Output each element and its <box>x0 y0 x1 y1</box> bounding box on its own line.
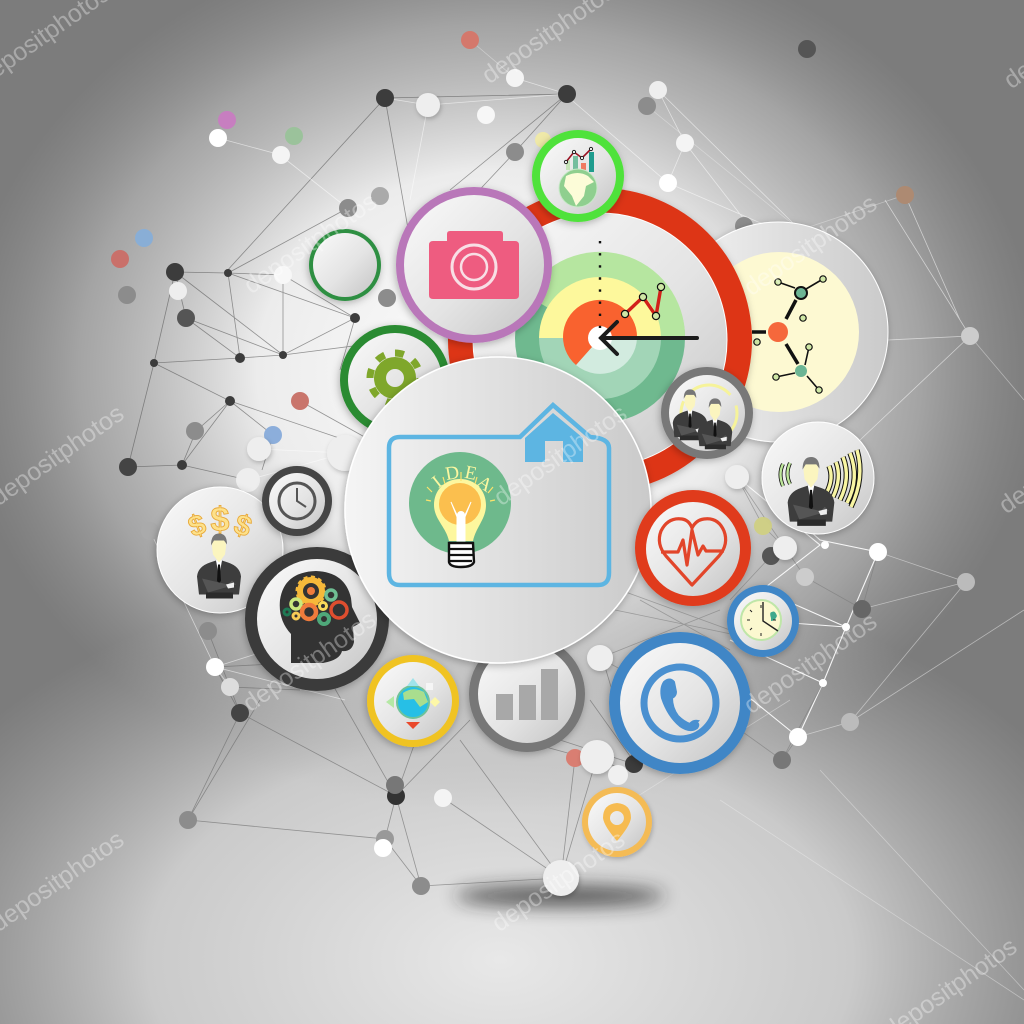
watermarks: depositphotos <box>487 825 630 938</box>
bar and line chart <box>564 147 594 172</box>
globe with arrows <box>386 678 440 729</box>
dollar signs <box>184 501 256 544</box>
white and soft nodes <box>169 69 887 896</box>
idea lettering: D <box>444 462 461 485</box>
idea lettering <box>428 462 496 497</box>
earth arrows badge <box>367 655 459 747</box>
dotted line <box>599 241 601 328</box>
businessman <box>788 457 834 526</box>
bars <box>496 669 558 720</box>
businessman <box>197 534 241 598</box>
sound waves <box>780 450 860 507</box>
dollar signs: $ <box>211 501 230 539</box>
idea lettering: I <box>428 472 446 493</box>
idea bulb <box>409 452 511 567</box>
folder outline with roof <box>389 405 609 585</box>
head silhouette <box>280 571 360 663</box>
small clock badge dark <box>262 466 332 536</box>
clock dial <box>747 602 778 636</box>
idea lettering: E <box>463 462 479 485</box>
watermarks: depositphotos <box>238 605 381 718</box>
small outlined green circle <box>309 229 381 301</box>
camera icon <box>429 231 519 299</box>
phone badge <box>609 632 751 774</box>
heart badge <box>635 490 751 606</box>
coloured gears <box>284 577 347 624</box>
heart icon <box>659 519 726 585</box>
phone icon <box>661 680 698 730</box>
bar chart badge <box>469 636 585 752</box>
molecule icon <box>752 276 826 393</box>
location pin badge <box>582 787 652 857</box>
brain head badge <box>245 547 389 691</box>
watermarks: depositphotos <box>489 399 632 512</box>
gauge chart <box>515 241 697 423</box>
gear badge <box>340 325 450 435</box>
red ring with gauge <box>448 188 752 492</box>
clock-hand arrow <box>601 322 697 354</box>
idea lettering: A <box>473 472 496 497</box>
globe <box>559 169 597 207</box>
dollar businessman disc <box>157 487 283 613</box>
dollar signs: $ <box>184 508 210 544</box>
two businessmen <box>673 389 732 449</box>
network nodes <box>111 31 979 896</box>
home icon <box>525 413 583 462</box>
gear icon <box>370 353 420 403</box>
small clock badge blue <box>727 585 799 657</box>
watermarks: depositphotos <box>739 607 882 720</box>
main idea disc <box>345 357 651 663</box>
dollar signs: $ <box>230 508 256 544</box>
watermarks: depositphotos <box>239 187 382 300</box>
camera badge <box>396 187 552 343</box>
floor shadow <box>455 885 665 907</box>
dark nodes <box>119 40 816 805</box>
molecule disc <box>668 222 888 442</box>
globe chart badge <box>532 130 624 222</box>
watermarks: depositphotos <box>739 189 882 302</box>
trend line <box>621 283 665 320</box>
grey nodes <box>118 97 979 895</box>
people badge <box>661 367 753 459</box>
caller disc <box>762 422 874 534</box>
pin icon <box>603 803 631 841</box>
coloured nodes <box>111 31 914 767</box>
